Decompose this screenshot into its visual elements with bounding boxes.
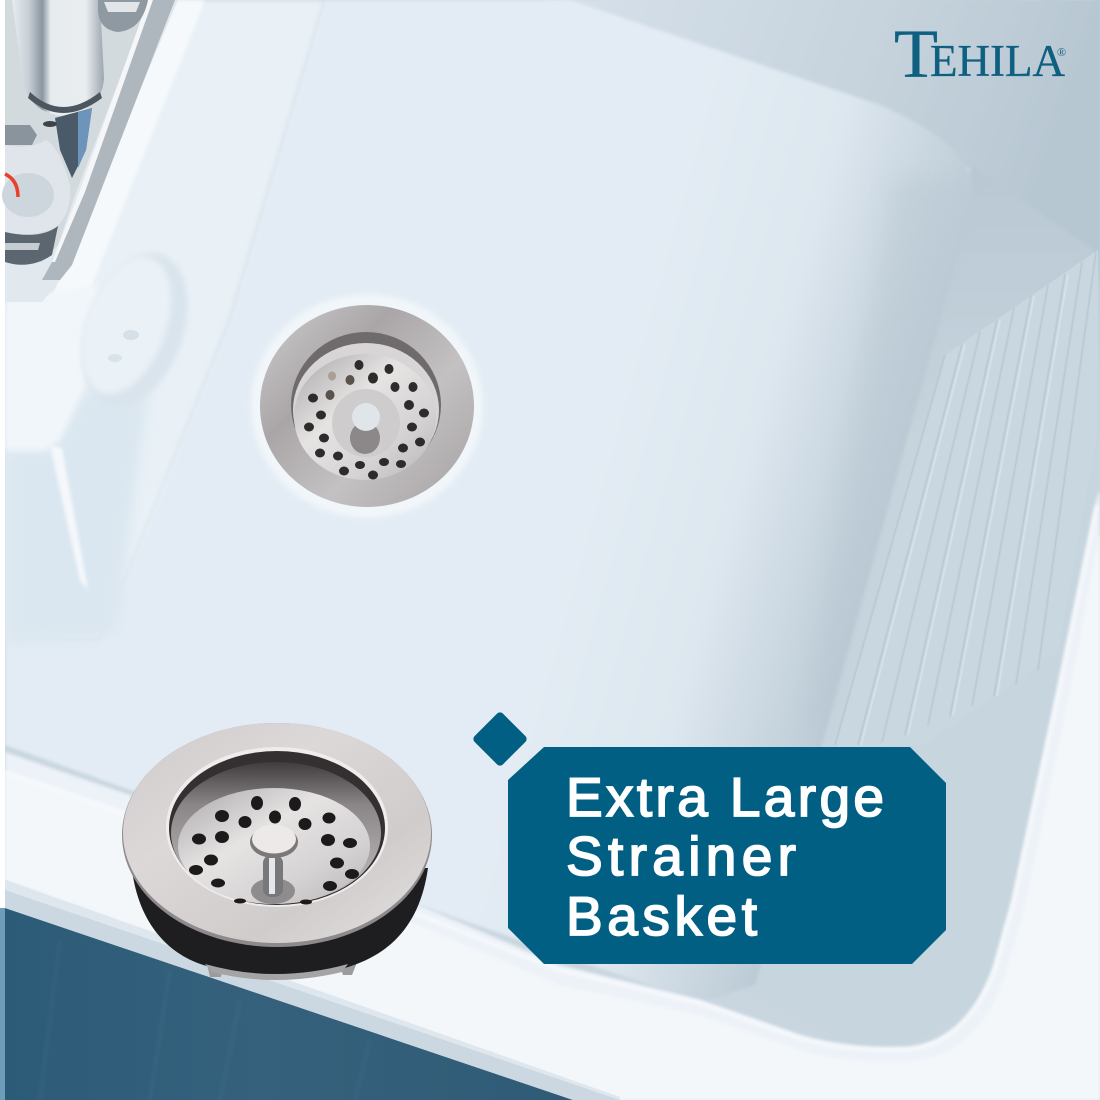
centre disk and knob — [332, 389, 400, 457]
callout: feature label — [508, 747, 946, 964]
basket — [178, 788, 370, 904]
flange — [122, 723, 432, 947]
callout text: Extra Large — [566, 766, 884, 828]
diamond accent — [472, 711, 528, 767]
deck plate — [5, 0, 178, 302]
second spout collar — [98, 0, 148, 32]
front rim — [5, 490, 1100, 1100]
logo: Tehila: T — [894, 16, 938, 92]
product strainer cutout — [122, 723, 432, 980]
plate edge strip — [42, 0, 175, 280]
prongs — [206, 960, 224, 977]
installed drain strainer — [251, 294, 483, 518]
drain flange — [260, 305, 474, 507]
spout body — [12, 0, 104, 116]
round handle — [5, 125, 37, 145]
blue floor — [5, 908, 573, 1100]
callout text: Basket — [566, 885, 757, 947]
chrome faucet — [2, 0, 178, 302]
left deck and basin ledge — [5, 0, 325, 640]
ribbed washboard — [835, 250, 1098, 748]
logo: Tehila: EHILA — [930, 36, 1065, 86]
callout text — [566, 766, 884, 947]
logo: Tehila: ® — [1057, 45, 1066, 59]
knob and stem — [251, 878, 295, 904]
basin back wall — [540, 0, 1100, 280]
rubber gasket — [132, 868, 428, 976]
corner shadow — [805, 175, 965, 730]
callout text: Strainer — [566, 825, 796, 887]
basin right wall — [740, 165, 1100, 1060]
rim lower band — [5, 890, 620, 1100]
logo: Tehila — [894, 16, 1066, 92]
drain basket — [294, 354, 436, 480]
soap dish — [63, 238, 207, 422]
